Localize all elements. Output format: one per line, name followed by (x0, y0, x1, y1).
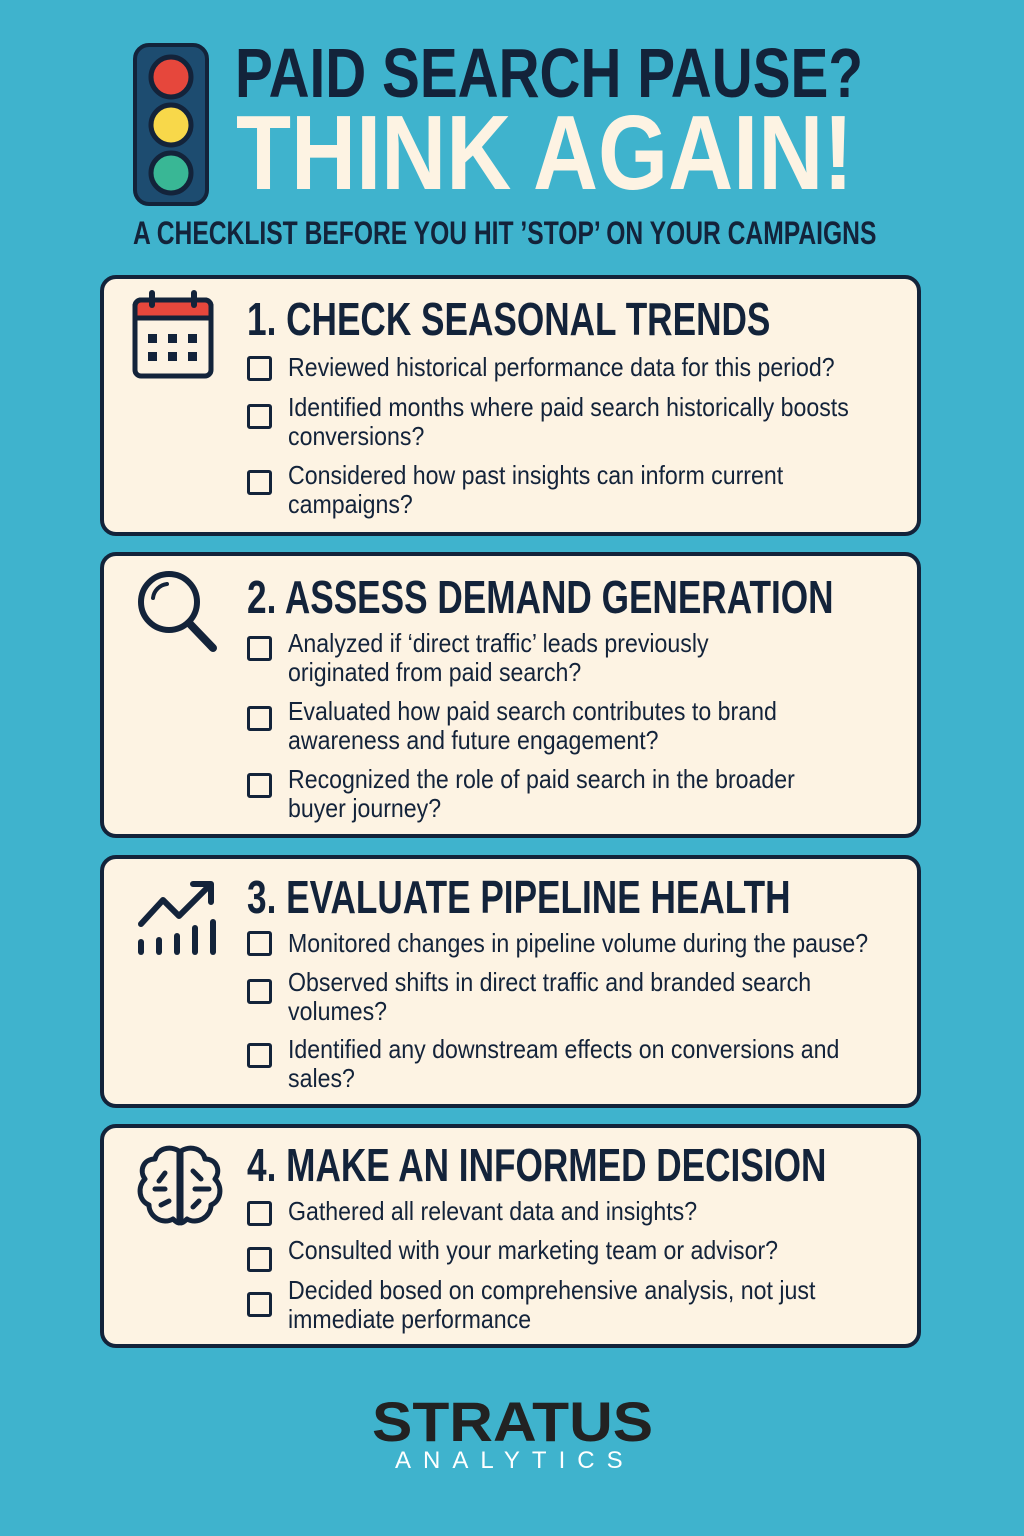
checklist 3 (247, 928, 868, 1093)
text: volumes? (288, 996, 387, 1026)
text: awareness and future engagement? (288, 725, 659, 755)
checklist 2 (247, 628, 795, 823)
logo: Stratus Analytics: STRATUS (372, 1390, 653, 1453)
text: immediate performance (288, 1304, 531, 1334)
panel: seasonal trends (100, 275, 921, 536)
text: Considered how past insights can inform current (288, 460, 783, 490)
text: Decided bosed on comprehensive analysis, not just (288, 1275, 815, 1305)
text: campaigns? (288, 489, 413, 519)
icon: brain (138, 1146, 222, 1226)
panel: pipeline health (100, 855, 921, 1108)
icon: magnifier (138, 571, 217, 652)
title line 2: THINK AGAIN! (236, 94, 853, 212)
heading 3: 3. EVALUATE PIPELINE HEALTH (247, 871, 791, 923)
heading 1: 1. CHECK SEASONAL TRENDS (247, 293, 770, 345)
title line 1: PAID SEARCH PAUSE? (235, 34, 863, 112)
checklist 1 (247, 352, 849, 519)
text: Observed shifts in direct traffic and branded search (288, 967, 811, 997)
text: Identified any downstream effects on conversions and (288, 1034, 839, 1064)
logo: Stratus Analytics: ANALYTICS (395, 1447, 635, 1474)
icon: calendar (132, 290, 214, 378)
heading 2: 2. ASSESS DEMAND GENERATION (247, 571, 834, 623)
subtitle: A CHECKLIST BEFORE YOU HIT ’STOP’ ON YOUR CAMPAIGNS (133, 215, 876, 251)
icon: traffic light (133, 43, 209, 206)
text: Reviewed historical performance data for this period? (288, 352, 835, 382)
text: Consulted with your marketing team or advisor? (288, 1235, 778, 1265)
text: Gathered all relevant data and insights? (288, 1196, 697, 1226)
heading 4: 4. MAKE AN INFORMED DECISION (247, 1139, 826, 1191)
text: Identified months where paid search historically boosts (288, 392, 849, 422)
text: Analyzed if ‘direct traffic’ leads previously (288, 628, 709, 658)
text: originated from paid search? (288, 657, 581, 687)
icon: growth chart (138, 881, 216, 955)
text: buyer journey? (288, 793, 441, 823)
text: Recognized the role of paid search in the broader (288, 764, 795, 794)
checklist 4 (247, 1196, 816, 1334)
text: sales? (288, 1063, 355, 1093)
text: Evaluated how paid search contributes to brand (288, 696, 777, 726)
panel: informed decision (100, 1124, 921, 1348)
panel: demand generation (100, 552, 921, 838)
text: conversions? (288, 421, 424, 451)
text: Monitored changes in pipeline volume during the pause? (288, 928, 868, 958)
